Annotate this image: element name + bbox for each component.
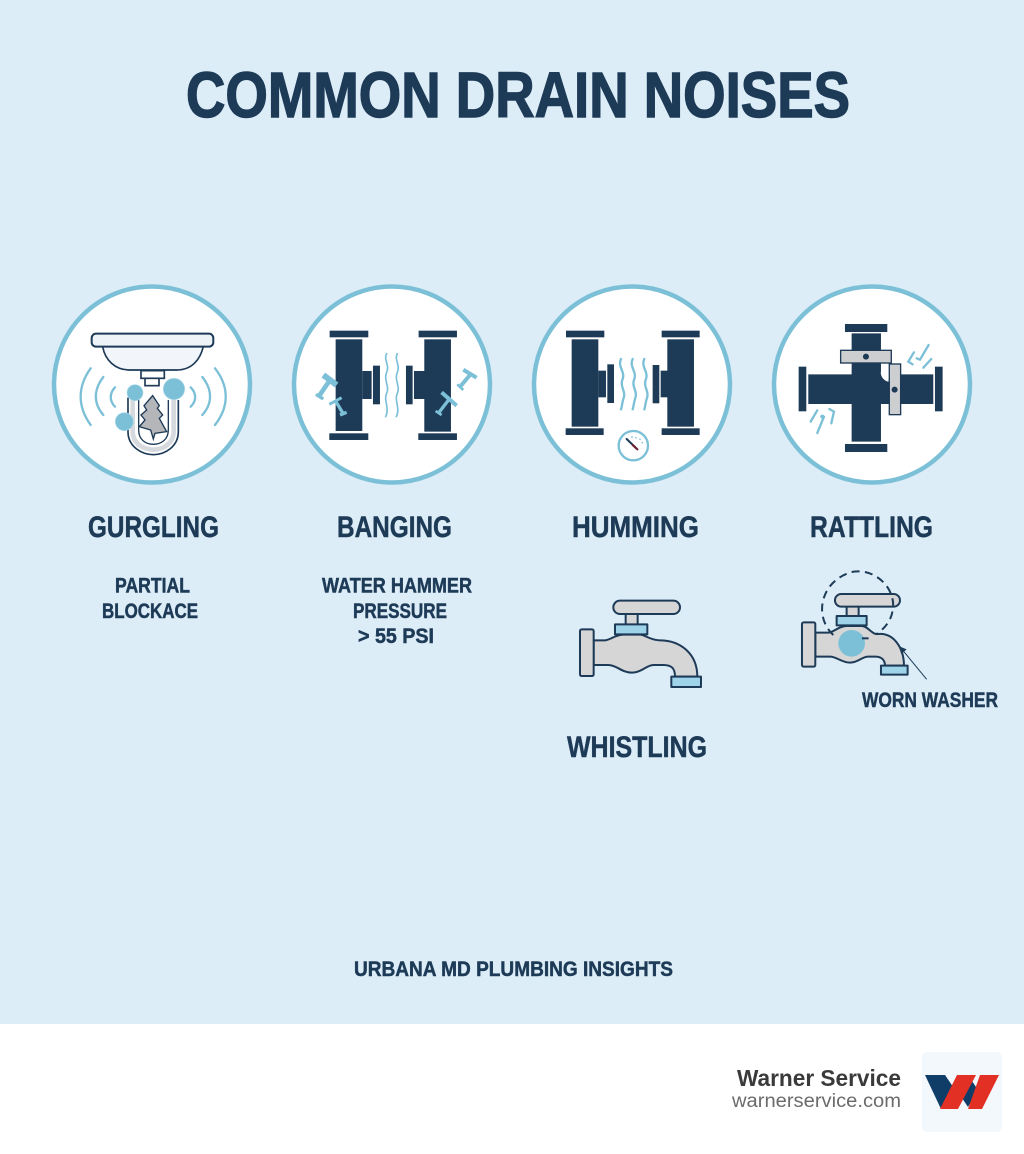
left pipe <box>566 331 614 435</box>
text block: banging cause: WATER HAMMER <box>322 574 472 598</box>
faucet body <box>802 594 908 675</box>
sink basin <box>92 334 213 386</box>
footer caption: URBANA MD PLUMBING INSIGHTS <box>354 957 673 981</box>
icon: faucet <box>580 601 701 687</box>
cross pipe <box>808 333 933 442</box>
worn washer <box>838 630 865 657</box>
text block: banging cause: > 55 PSI <box>358 624 434 648</box>
bubbles <box>115 378 185 431</box>
hum waves <box>620 359 648 409</box>
brand name: Warner Service <box>737 1065 901 1091</box>
heading: gurgling: GURGLING <box>88 511 219 544</box>
right pipe <box>653 331 700 435</box>
clog <box>139 396 167 439</box>
heading: whistling: WHISTLING <box>567 731 707 764</box>
hammers <box>316 370 477 415</box>
left pipe <box>329 331 380 440</box>
sound waves <box>81 368 226 425</box>
right pipe <box>406 331 457 440</box>
text block: gurgling cause <box>102 574 198 623</box>
panel: gurgling icon <box>54 286 250 482</box>
text block: banging cause: PRESSURE <box>353 599 447 623</box>
clamps <box>841 350 901 415</box>
pressure gauge <box>619 431 648 460</box>
website: warnerservice.com <box>731 1091 901 1112</box>
dashed highlight <box>822 571 893 635</box>
text block: gurgling cause: BLOCKACE <box>102 599 198 623</box>
icon: faucet with worn washer <box>802 571 927 679</box>
heading: banging: BANGING <box>337 511 452 544</box>
heading: humming: HUMMING <box>572 511 699 544</box>
brand footer <box>0 1024 1024 1154</box>
panel: humming icon <box>534 286 730 482</box>
panel: banging icon <box>294 286 490 482</box>
text block: gurgling cause: PARTIAL <box>115 574 190 598</box>
panel: rattling icon <box>774 286 970 482</box>
title: COMMON DRAIN NOISES <box>186 59 850 131</box>
arrow <box>899 646 927 679</box>
logo <box>922 1052 1002 1132</box>
p-trap <box>128 398 178 455</box>
vibration waves <box>386 354 398 417</box>
rattle marks <box>811 345 931 433</box>
heading: rattling: RATTLING <box>810 511 933 544</box>
text block: banging cause <box>322 574 472 648</box>
